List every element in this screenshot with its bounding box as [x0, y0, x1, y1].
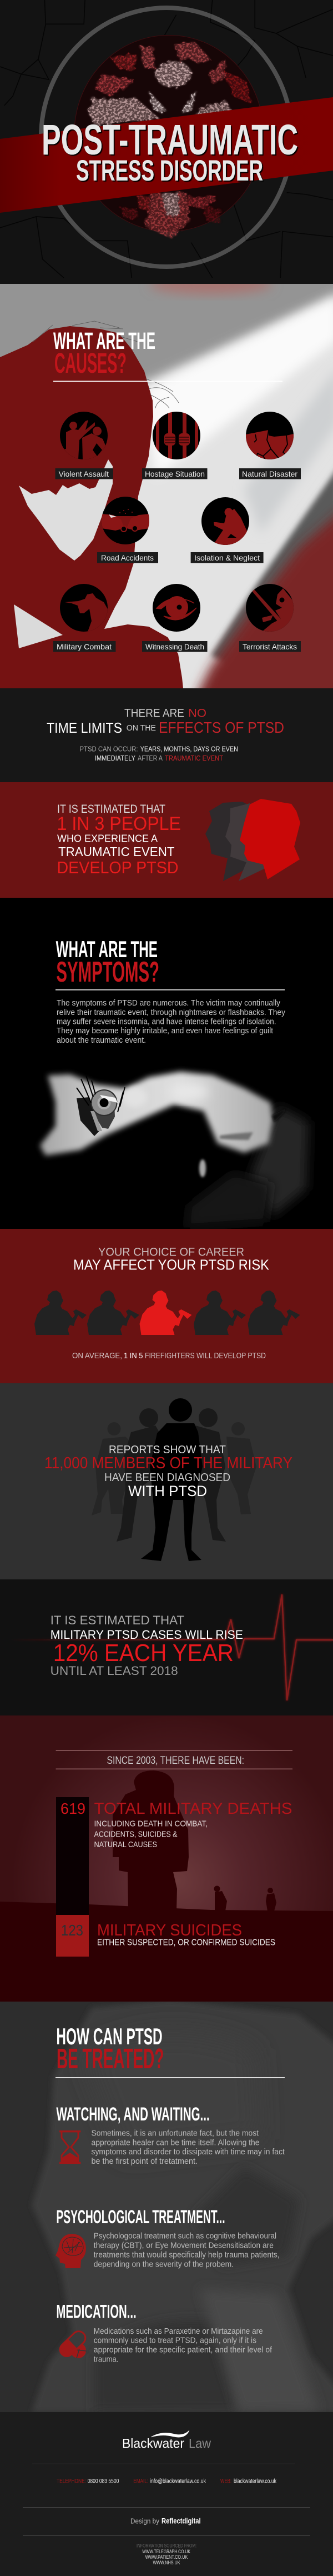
- sources: INFORMATION SOURCED FROM:: [137, 2543, 196, 2549]
- brain scan: [74, 35, 264, 239]
- sources: WWW.TELEGRAPH.CO.UK: [142, 2549, 190, 2554]
- contact details: WEB:: [220, 2478, 231, 2484]
- design credit: Design by: [130, 2517, 159, 2525]
- panel: twelve percent: IT IS ESTIMATED THAT: [51, 1613, 184, 1627]
- photo: eye and face: [40, 1072, 309, 1228]
- soldiers silhouette: [92, 1398, 256, 1561]
- panel: time limits: THERE ARE: [124, 707, 184, 720]
- panel: time limits: ON THE: [127, 723, 156, 733]
- panel: twelve percent: MILITARY PTSD CASES WILL RISE: [51, 1628, 243, 1642]
- panel: military deaths: INCLUDING DEATH IN COMBAT,: [94, 1819, 208, 1829]
- labels: causes: Isolation & Neglect: [194, 553, 260, 562]
- panel: time limits: [0, 688, 333, 782]
- text block: symptoms: relive their traumatic event, through nightmares or flashbacks. They: [57, 1008, 286, 1017]
- icon: isolation: [201, 497, 249, 545]
- treatment: medication: MEDICATION...: [56, 2302, 137, 2323]
- panel: military deaths: SINCE 2003, THERE HAVE BEEN:: [107, 1755, 244, 1767]
- labels: causes: Military Combat: [57, 642, 112, 651]
- panel: career risk: YOUR CHOICE OF CAREER: [98, 1246, 244, 1259]
- heads illustration: [205, 799, 300, 881]
- treatment: psychological: therapy (CBT), or Eye Movement Desensitisation are: [94, 2242, 274, 2250]
- icon: hostage bars: [153, 412, 200, 459]
- contact details: blackwaterlaw.co.uk: [234, 2478, 276, 2484]
- sources: WWW.NHS.UK: [153, 2560, 180, 2565]
- treatment: medication: Medications such as Paraxetine or Mirtazapine are: [94, 2327, 263, 2336]
- panel: one in three: DEVELOP PTSD: [57, 858, 179, 877]
- panel: twelve percent: UNTIL AT LEAST 2018: [51, 1664, 178, 1678]
- panel: time limits: AFTER A: [138, 754, 163, 762]
- icon: head with brain: [56, 2234, 86, 2268]
- treatment: medication: [56, 2302, 273, 2364]
- panel: one in three: TRAUMATIC EVENT: [58, 844, 174, 859]
- heading: causes: WHAT ARE THE: [53, 328, 155, 354]
- panel: military deaths: TOTAL MILITARY DEATHS: [94, 1800, 292, 1818]
- contact details: info@blackwaterlaw.co.uk: [150, 2478, 206, 2484]
- contact details: 0800 083 5500: [88, 2478, 119, 2484]
- panel: twelve percent: [0, 1579, 333, 1715]
- panel: time limits: PTSD CAN OCCUR:: [80, 745, 138, 753]
- icon: witnessing death: [153, 584, 200, 632]
- heading: treatment: BE TREATED?: [57, 2043, 164, 2074]
- icon: pill: [57, 2329, 88, 2359]
- labels: causes: Road Accidents: [101, 553, 154, 562]
- sources: WWW.PATIENT.CO.UK: [145, 2554, 188, 2560]
- panel: one in three: IT IS ESTIMATED THAT: [57, 803, 165, 816]
- labels: causes: Witnessing Death: [145, 642, 204, 651]
- panel: military diagnoses: REPORTS SHOW THAT: [109, 1443, 226, 1456]
- head silhouette: [0, 326, 183, 688]
- contact details: [57, 2478, 276, 2484]
- treatment: watching and waiting: be the first point of tretatment.: [91, 2157, 198, 2166]
- heading: causes: CAUSES?: [54, 347, 127, 379]
- heartbeat line: [8, 1594, 333, 1700]
- panel: military deaths: 619: [60, 1800, 85, 1817]
- logo: Blackwater Law: Blackwater: [122, 2437, 184, 2452]
- panel: military diagnoses: [0, 1383, 333, 1579]
- panel: military diagnoses: WITH PTSD: [128, 1483, 207, 1499]
- panel: career risk: ON AVERAGE,: [72, 1352, 122, 1360]
- firefighters pictogram: [34, 1290, 300, 1335]
- labels: causes: Hostage Situation: [145, 469, 205, 478]
- heading: causes: [53, 328, 282, 382]
- panel: time limits: NO: [188, 707, 206, 720]
- panel: footer: [0, 2412, 333, 2576]
- icon: violent assault: [60, 412, 108, 459]
- panel: time limits: IMMEDIATELY: [95, 754, 135, 762]
- panel: one in three: [0, 782, 333, 898]
- heading: treatment: [56, 2023, 285, 2078]
- panel: career risk: MAY AFFECT YOUR PTSD RISK: [73, 1258, 269, 1273]
- icon: military combat: [60, 584, 108, 632]
- text block: symptoms: may suffer severe insomnia, and have intense feelings of isolation.: [57, 1018, 276, 1027]
- heading: symptoms: SYMPTOMS?: [56, 956, 159, 988]
- panel: career risk: 1 IN 5: [124, 1352, 143, 1360]
- labels: causes: Natural Disaster: [242, 469, 297, 478]
- panel: one in three: WHO EXPERIENCE A: [57, 832, 158, 844]
- labels: causes: Terrorist Attacks: [243, 642, 297, 651]
- panel: time limits: TIME LIMITS: [47, 721, 122, 736]
- treatment: psychological: treatments that would specifically help trauma patients,: [94, 2251, 280, 2260]
- heading: symptoms: [56, 936, 285, 991]
- stat bar: suicides: [56, 1915, 89, 1957]
- panel: military diagnoses: 11,000 MEMBERS OF THE MILITARY: [44, 1454, 292, 1472]
- panel: military deaths: ACCIDENTS, SUICIDES &: [94, 1830, 178, 1839]
- treatment: psychological: [56, 2207, 280, 2269]
- panel: military deaths: NATURAL CAUSES: [94, 1840, 157, 1849]
- icon: natural disaster: [246, 412, 294, 459]
- panel: one in three: 1 IN 3 PEOPLE: [57, 813, 181, 834]
- ground and soldiers: [0, 1770, 333, 2002]
- treatment: medication: appropriate for the specific patient, and their level of: [94, 2345, 273, 2355]
- icon: road accidents: [102, 497, 149, 544]
- design credit: [130, 2517, 201, 2525]
- panel: treatment: [0, 2000, 333, 2412]
- panel: military deaths: 123: [61, 1922, 83, 1939]
- panel: time limits: YEARS, MONTHS, DAYS OR EVEN: [140, 745, 238, 753]
- labels: causes: Violent Assault: [59, 469, 109, 478]
- icon: hourglass: [59, 2130, 80, 2164]
- panel: military deaths: MILITARY SUICIDES: [97, 1922, 242, 1939]
- heading: symptoms: WHAT ARE THE: [56, 936, 158, 962]
- title: [42, 116, 298, 187]
- panel: hero header: [0, 0, 333, 284]
- eye: [77, 1076, 125, 1136]
- sources: [137, 2543, 196, 2565]
- treatment: psychological: depending on the severity of the probem.: [94, 2260, 234, 2269]
- ghost skull background: [32, 2000, 333, 2412]
- panel: career risk: FIREFIGHTERS WILL DEVELOP PTSD: [145, 1352, 266, 1360]
- contact details: TELEPHONE:: [57, 2478, 86, 2484]
- panel: twelve percent: 12% EACH YEAR: [53, 1639, 234, 1667]
- labels: causes: [53, 468, 301, 652]
- elbow gap: [14, 604, 63, 648]
- text block: symptoms: about the traumatic event.: [57, 1036, 146, 1045]
- treatment: medication: commonly used to treat PTSD, again, only if it is: [94, 2336, 256, 2345]
- panel: military diagnoses: HAVE BEEN DIAGNOSED: [104, 1471, 230, 1484]
- treatment: watching and waiting: WATCHING, AND WAITING...: [56, 2104, 210, 2125]
- panel: time limits: EFFECTS OF PTSD: [159, 719, 284, 736]
- icon: terrorist attacks: [246, 584, 294, 632]
- panel: time limits: TRAUMATIC EVENT: [165, 754, 223, 762]
- treatment: psychological: Psychologocal treatment such as cognitive behavioural: [94, 2232, 276, 2241]
- treatment: watching and waiting: Sometimes, it is an unfortunate fact, but the most: [91, 2129, 259, 2138]
- panel: symptoms: [0, 898, 333, 1229]
- stat bar: deaths: [56, 1797, 89, 1915]
- treatment: watching and waiting: symptoms and disorder to dissipate with time may in fact: [91, 2148, 285, 2157]
- hand gap: [19, 459, 113, 561]
- ring: [41, 8, 292, 267]
- red title band: [0, 97, 333, 213]
- panel: military deaths: EITHER SUSPECTED, OR CONFIRMED SUICIDES: [97, 1938, 275, 1948]
- text block: symptoms: [57, 999, 286, 1045]
- contact details: EMAIL:: [133, 2478, 148, 2484]
- treatment: medication: trauma.: [94, 2355, 119, 2364]
- design credit: Reflectdigital: [162, 2517, 201, 2525]
- text block: symptoms: The symptoms of PTSD are numerous. The victim may continually: [57, 999, 281, 1008]
- logo: Blackwater Law: [122, 2430, 211, 2452]
- treatment: watching and waiting: appropriate healer can be time itself. Allowing the: [91, 2138, 260, 2147]
- logo: Blackwater Law: Law: [189, 2437, 211, 2452]
- panel: military deaths: [0, 1715, 333, 2002]
- treatment: watching and waiting: [56, 2104, 285, 2166]
- rules: [56, 1750, 292, 1769]
- panel: causes: [0, 267, 333, 711]
- heading: treatment: HOW CAN PTSD: [56, 2023, 163, 2049]
- panel: career risk: [0, 1229, 333, 1383]
- text block: symptoms: They may become highly irritable, and even have feelings of guilt: [57, 1027, 273, 1036]
